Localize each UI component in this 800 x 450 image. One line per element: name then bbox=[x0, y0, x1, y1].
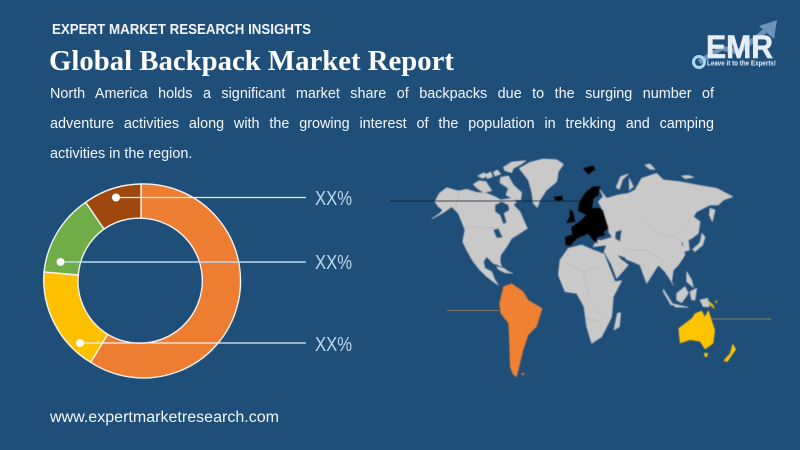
description text: North America holds a significant market share of backpacks due to the surging number of bbox=[50, 86, 714, 102]
label 2: XX% bbox=[315, 252, 352, 274]
North America bbox=[432, 188, 527, 285]
world map bbox=[390, 158, 771, 378]
Japan and Sakhalin bbox=[693, 208, 715, 252]
Caribbean bbox=[497, 267, 513, 273]
donut chart bbox=[43, 183, 352, 379]
Southeast Asian islands bbox=[663, 272, 709, 307]
country borders bbox=[456, 191, 688, 322]
segment: brown bbox=[86, 184, 141, 229]
description text: adventure activities along with the growing interest of the population in trekking and camping bbox=[50, 116, 714, 132]
region: Oceania bbox=[678, 299, 736, 362]
map leader: South America bbox=[447, 309, 499, 312]
segment: yellow bbox=[44, 272, 108, 362]
label 1: XX% bbox=[315, 188, 352, 210]
leader line 3 bbox=[76, 339, 306, 347]
inland water bbox=[467, 202, 628, 267]
label 3: XX% bbox=[315, 334, 352, 356]
Madagascar bbox=[614, 313, 621, 330]
description text bbox=[50, 86, 714, 162]
Arctic islands bbox=[473, 161, 526, 200]
segment: orange bbox=[91, 184, 241, 378]
Africa bbox=[558, 245, 622, 343]
map leader: Europe bbox=[390, 200, 582, 202]
segment: green bbox=[44, 202, 104, 275]
description text: activities in the region. bbox=[50, 146, 192, 162]
region: rest of world bbox=[432, 159, 733, 343]
map leader: Oceania bbox=[711, 318, 771, 320]
region: Europe bbox=[554, 166, 608, 246]
logo: EMR: EMR bbox=[706, 29, 773, 65]
logo: EMR bbox=[692, 20, 777, 69]
title: Global Backpack Market Report bbox=[49, 45, 454, 77]
leader line 1 bbox=[112, 194, 306, 202]
region: South America bbox=[499, 283, 542, 377]
leader line 2 bbox=[56, 258, 306, 266]
Eurasia bbox=[593, 173, 733, 285]
Greenland bbox=[519, 159, 563, 208]
logo: EMR: Leave it to the Experts! bbox=[707, 58, 776, 68]
Arctic Russia islands bbox=[616, 164, 694, 190]
website footer: www.expertmarketresearch.com bbox=[49, 409, 279, 426]
